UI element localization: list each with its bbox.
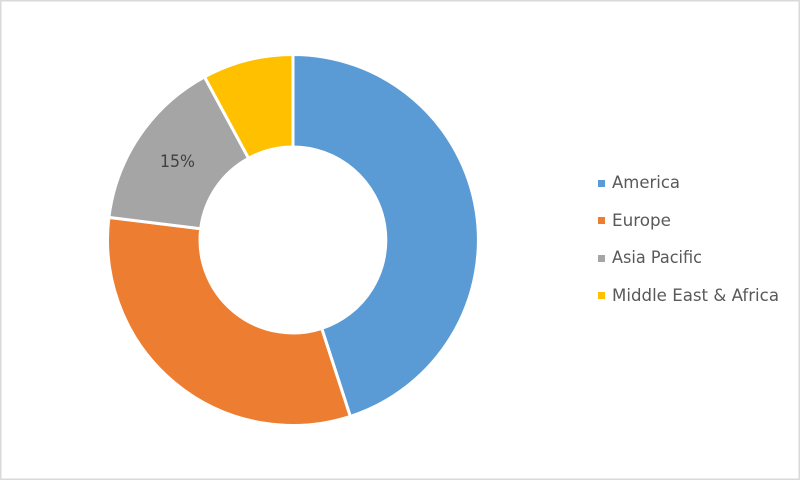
segment: Asia Pacific: [109, 77, 249, 229]
legend item: Middle East & Africa: Middle East & Africa: [612, 286, 779, 305]
segment: Europe: [108, 217, 350, 425]
segment: Middle East & Africa: [204, 54, 293, 158]
data label: 15%: 15%: [160, 152, 195, 171]
donut chart: [108, 54, 478, 425]
legend item: America: America: [612, 173, 680, 192]
segment: America: [293, 54, 478, 416]
legend item: Europe: Europe: [612, 211, 671, 230]
legend: [598, 173, 779, 305]
legend item: Asia Pacific: Asia Pacific: [612, 248, 702, 267]
